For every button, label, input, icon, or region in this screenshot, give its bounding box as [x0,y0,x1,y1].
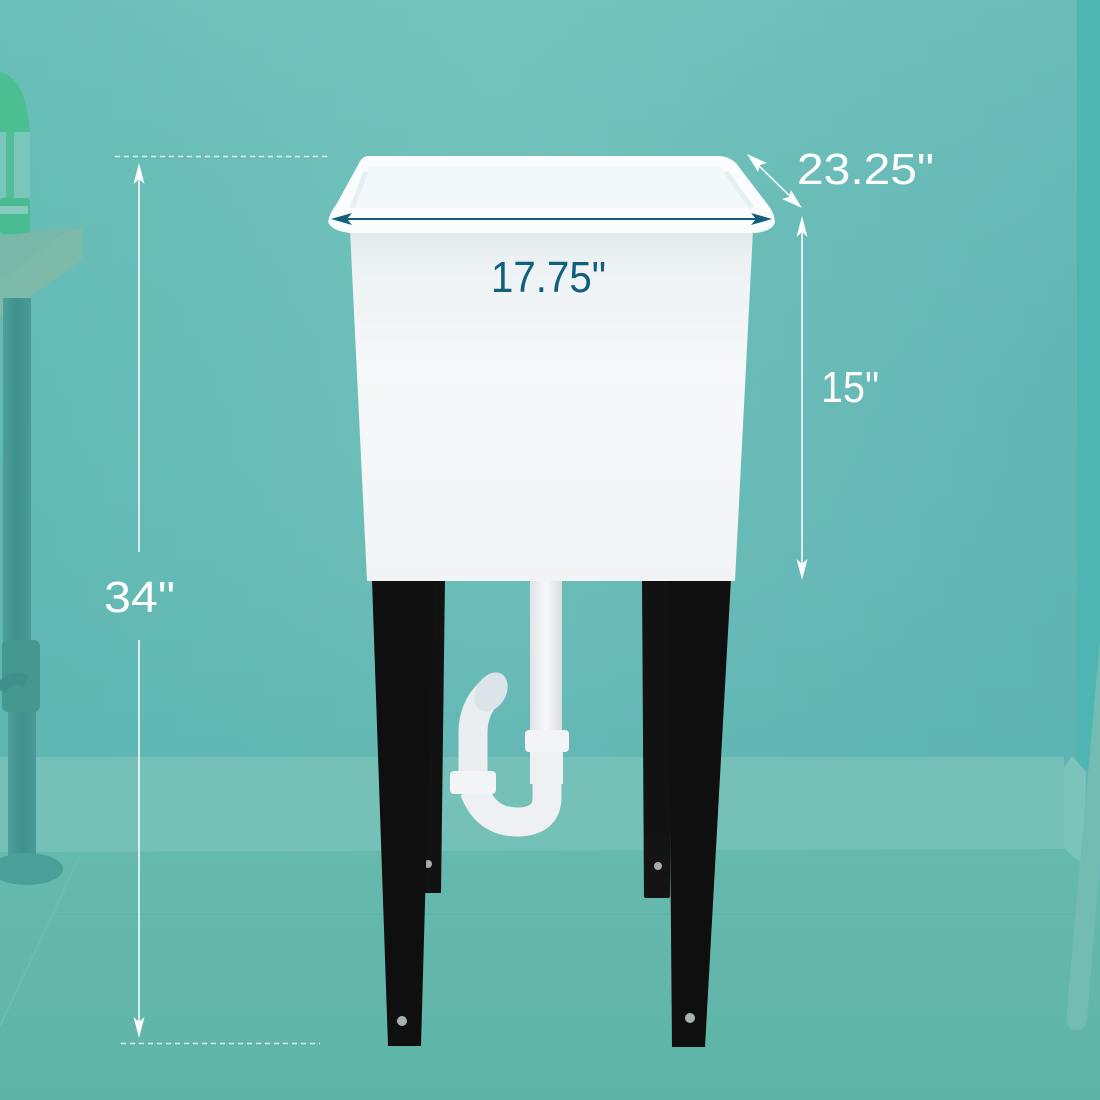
dimension: depth 23.25 inches: 23.25" [797,145,934,194]
baseboard [0,756,1086,868]
dimension: height 15 inches: 15" [821,363,879,412]
front right leg [668,578,731,1047]
bottle body [0,132,30,204]
dimension: width 17.75 inches [331,213,772,302]
bottle cap [0,72,30,132]
dimension: height 34 inches [104,156,328,1044]
dimension: width 17.75 inches: 17.75" [491,253,606,302]
dimension: height 15 inches [796,216,879,580]
front left leg [372,580,434,1046]
background wall [0,0,1100,860]
side shelf and bottle [0,72,82,318]
sink basin [328,156,775,581]
back legs [415,578,672,898]
drain pipe [450,578,569,822]
right pipe [1066,640,1100,1030]
shelf [0,228,82,318]
floor [0,849,1100,1100]
dimension: depth 23.25 inches [747,145,934,208]
dimension: height 34 inches: 34" [104,573,175,622]
side pipe stand [0,298,63,885]
